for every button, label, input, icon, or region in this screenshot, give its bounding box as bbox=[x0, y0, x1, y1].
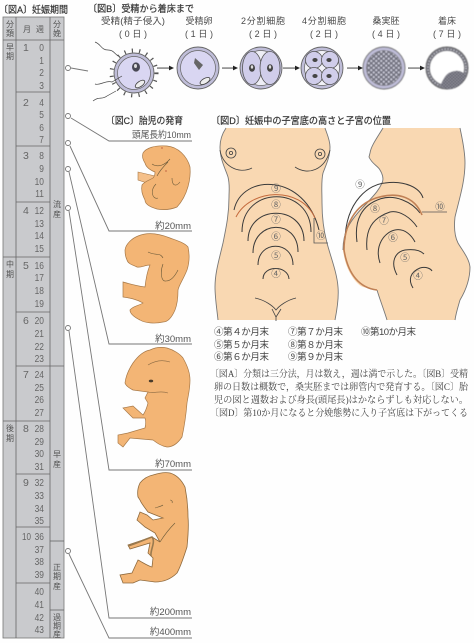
classification column: 中 bbox=[6, 259, 14, 269]
classification column: 早 bbox=[6, 43, 14, 52]
week numbers: 18 bbox=[35, 285, 44, 297]
delivery column bbox=[53, 199, 61, 639]
week numbers: 22 bbox=[35, 341, 44, 353]
week numbers: 20 bbox=[35, 315, 44, 327]
week numbers: 28 bbox=[35, 423, 44, 435]
caption text block: 卵の日数は概数で，桑実胚までは卵管内で発育する。〔図C〕胎 bbox=[214, 381, 468, 393]
table header: 週 bbox=[36, 24, 44, 34]
week numbers: 34 bbox=[35, 503, 44, 515]
week numbers bbox=[35, 42, 44, 636]
month numbers bbox=[22, 42, 31, 543]
stage labels: (7日) bbox=[433, 29, 461, 39]
heading: figure A: 〔図A〕妊娠期間 bbox=[0, 4, 68, 16]
arc numbers, side bbox=[355, 180, 445, 282]
week numbers: 2 bbox=[39, 67, 44, 79]
stage labels: 受精卵 bbox=[186, 15, 212, 26]
icon: morula (day 4) bbox=[363, 47, 405, 89]
week numbers: 37 bbox=[35, 544, 44, 556]
arc numbers, front: ⑧ bbox=[271, 200, 281, 211]
week numbers: 30 bbox=[35, 448, 44, 460]
arc numbers, front bbox=[271, 184, 326, 280]
month numbers: 5 bbox=[23, 260, 29, 272]
week numbers: 21 bbox=[35, 328, 44, 340]
week numbers: 36 bbox=[35, 531, 44, 543]
arc numbers, side: ⑩ bbox=[435, 202, 445, 213]
size labels: 頭尾長約10mm bbox=[132, 129, 191, 141]
caption text block bbox=[210, 368, 468, 419]
arc numbers, side: ⑨ bbox=[355, 180, 365, 191]
legend: month numbers: ⑤第５か月末 bbox=[214, 339, 269, 351]
week numbers: 7 bbox=[39, 134, 44, 146]
classification column: 期 bbox=[6, 434, 14, 443]
arc numbers, front: ⑩ bbox=[316, 231, 326, 242]
month numbers: 8 bbox=[23, 423, 29, 435]
week numbers: 1 bbox=[39, 55, 44, 67]
week numbers: 27 bbox=[35, 407, 44, 419]
arc numbers, side: ⑦ bbox=[379, 216, 389, 227]
month 10 curve and leader bbox=[236, 195, 328, 243]
classification column bbox=[6, 43, 14, 443]
table header: 娩 bbox=[53, 28, 61, 38]
week numbers: 41 bbox=[35, 599, 44, 611]
table header: 月 bbox=[23, 25, 31, 34]
arc numbers, side: ⑤ bbox=[400, 253, 410, 264]
delivery column: 期 bbox=[53, 622, 61, 630]
stage labels: (2日) bbox=[249, 29, 277, 39]
legend: month numbers: ④第４か月末 bbox=[214, 326, 269, 338]
legend: month numbers: ⑧第８か月末 bbox=[288, 339, 343, 351]
stage labels: 4分割細胞 bbox=[302, 15, 346, 26]
stage labels: 桑実胚 bbox=[372, 15, 400, 26]
month numbers: 10 bbox=[22, 531, 31, 543]
delivery column: 過 bbox=[53, 612, 61, 622]
week numbers: 13 bbox=[35, 218, 44, 230]
size labels: 約400mm bbox=[150, 626, 191, 638]
uterus height arcs, front bbox=[234, 184, 319, 279]
icon: four-cell stage (day 2) bbox=[301, 47, 343, 89]
week numbers: 40 bbox=[35, 586, 44, 598]
arc numbers, front: ⑤ bbox=[271, 251, 281, 262]
stage labels bbox=[101, 15, 461, 39]
week numbers: 15 bbox=[35, 243, 44, 255]
legend: month numbers: ⑦第７か月末 bbox=[288, 326, 343, 338]
arc numbers, front: ⑦ bbox=[271, 215, 281, 226]
arc numbers, front: ④ bbox=[271, 269, 281, 280]
uterus height arcs, side bbox=[345, 182, 432, 288]
legend: month numbers: ⑥第６か月末 bbox=[214, 351, 269, 363]
month numbers: 4 bbox=[23, 205, 29, 217]
month numbers: 6 bbox=[23, 315, 29, 327]
week numbers: 0 bbox=[39, 42, 44, 54]
week numbers: 6 bbox=[39, 122, 44, 134]
table header: 分 bbox=[6, 20, 14, 29]
arc numbers, side: ⑥ bbox=[388, 233, 398, 244]
week numbers: 39 bbox=[35, 569, 44, 581]
heading: figure B: 〔図B〕受精から着床まで bbox=[88, 3, 194, 15]
week numbers: 8 bbox=[39, 150, 44, 162]
month numbers: 9 bbox=[23, 477, 29, 489]
caption text block: 児の図と週数および身長(頭尾長)はかならずしも対応しない。 bbox=[214, 394, 468, 406]
week numbers: 29 bbox=[35, 436, 44, 448]
delivery column: 期 bbox=[53, 572, 61, 581]
legend: month numbers bbox=[214, 326, 416, 363]
icon: two-cell stage (day 2) bbox=[240, 47, 282, 89]
arrows between stages bbox=[157, 66, 425, 70]
week numbers: 43 bbox=[35, 624, 44, 636]
week numbers: 17 bbox=[35, 272, 44, 284]
week numbers: 31 bbox=[35, 461, 44, 473]
classification column: 期 bbox=[6, 52, 14, 61]
breasts and pelvic lines bbox=[220, 148, 330, 321]
legend: month numbers: ⑩第10か月末 bbox=[361, 326, 416, 338]
week numbers: 3 bbox=[39, 80, 44, 92]
icon: egg with sperm (day 0) bbox=[93, 42, 156, 101]
delivery column: 産 bbox=[53, 209, 61, 219]
body side view bbox=[343, 128, 470, 320]
legend: month numbers: ⑨第９か月末 bbox=[288, 351, 343, 363]
fetus: 30mm bbox=[123, 234, 189, 323]
connector lines from table to figures bbox=[66, 66, 192, 638]
classification column: 期 bbox=[6, 270, 14, 279]
month 10 curve and leader, side bbox=[344, 195, 447, 290]
table header: 類 bbox=[6, 28, 14, 38]
month numbers: 7 bbox=[23, 369, 29, 381]
icon: fertilised egg (day 1) bbox=[177, 47, 219, 89]
stage labels: (0日) bbox=[119, 29, 147, 39]
delivery column: 産 bbox=[53, 581, 61, 591]
week numbers: 9 bbox=[39, 163, 44, 175]
heading: figure C: 〔図C〕胎児の発育 bbox=[106, 115, 183, 127]
week numbers: 23 bbox=[35, 353, 44, 365]
body front view bbox=[215, 128, 338, 321]
week numbers: 16 bbox=[35, 260, 44, 272]
month numbers: 3 bbox=[23, 150, 29, 162]
delivery column: 正 bbox=[53, 563, 61, 572]
icon: implantation blastocyst (day 7) bbox=[426, 47, 468, 89]
stage labels: 受精(精子侵入) bbox=[101, 15, 165, 26]
week numbers: 12 bbox=[35, 205, 44, 217]
week numbers: 35 bbox=[35, 515, 44, 527]
month numbers: 1 bbox=[23, 42, 29, 54]
table header bbox=[6, 20, 61, 38]
week numbers: 11 bbox=[35, 188, 44, 200]
size labels: 約200mm bbox=[150, 606, 191, 618]
week numbers: 32 bbox=[35, 477, 44, 489]
size labels: 約70mm bbox=[155, 458, 191, 470]
stage labels: (2日) bbox=[310, 29, 338, 39]
heading: figure D: 〔図D〕妊娠中の子宮底の高さと子宮の位置 bbox=[211, 115, 391, 127]
table header: 分 bbox=[53, 20, 61, 29]
classification column: 後 bbox=[6, 423, 14, 433]
week numbers: 42 bbox=[35, 612, 44, 624]
stage labels: (4日) bbox=[372, 29, 400, 39]
week numbers: 10 bbox=[35, 176, 44, 188]
week numbers: 19 bbox=[35, 298, 44, 310]
week numbers: 25 bbox=[35, 382, 44, 394]
week numbers: 26 bbox=[35, 394, 44, 406]
arc numbers, side: ④ bbox=[413, 271, 423, 282]
arc numbers, front: ⑥ bbox=[271, 232, 281, 243]
month numbers: 2 bbox=[23, 97, 29, 109]
fetus: 20mm bbox=[138, 146, 190, 210]
size labels bbox=[132, 129, 191, 638]
arc numbers, side: ⑧ bbox=[370, 204, 380, 215]
week numbers: 38 bbox=[35, 556, 44, 568]
week numbers: 5 bbox=[39, 109, 44, 121]
stage labels: 着床 bbox=[438, 15, 456, 26]
fetus: 200mm bbox=[120, 473, 188, 583]
delivery column: 産 bbox=[53, 629, 61, 639]
week numbers: 33 bbox=[35, 490, 44, 502]
week numbers: 4 bbox=[39, 97, 44, 109]
fetus: 70mm bbox=[118, 347, 190, 447]
delivery column: 産 bbox=[53, 459, 61, 469]
size labels: 約30mm bbox=[155, 333, 191, 345]
stage labels: (1日) bbox=[185, 29, 213, 39]
stage labels: 2分割細胞 bbox=[241, 15, 285, 26]
table: pregnancy period bbox=[3, 17, 64, 639]
delivery column: 早 bbox=[53, 450, 61, 459]
week numbers: 14 bbox=[35, 230, 44, 242]
delivery column: 流 bbox=[53, 199, 61, 209]
week numbers: 24 bbox=[35, 369, 44, 381]
arc numbers, front: ⑨ bbox=[271, 184, 281, 195]
size labels: 約20mm bbox=[155, 220, 191, 232]
